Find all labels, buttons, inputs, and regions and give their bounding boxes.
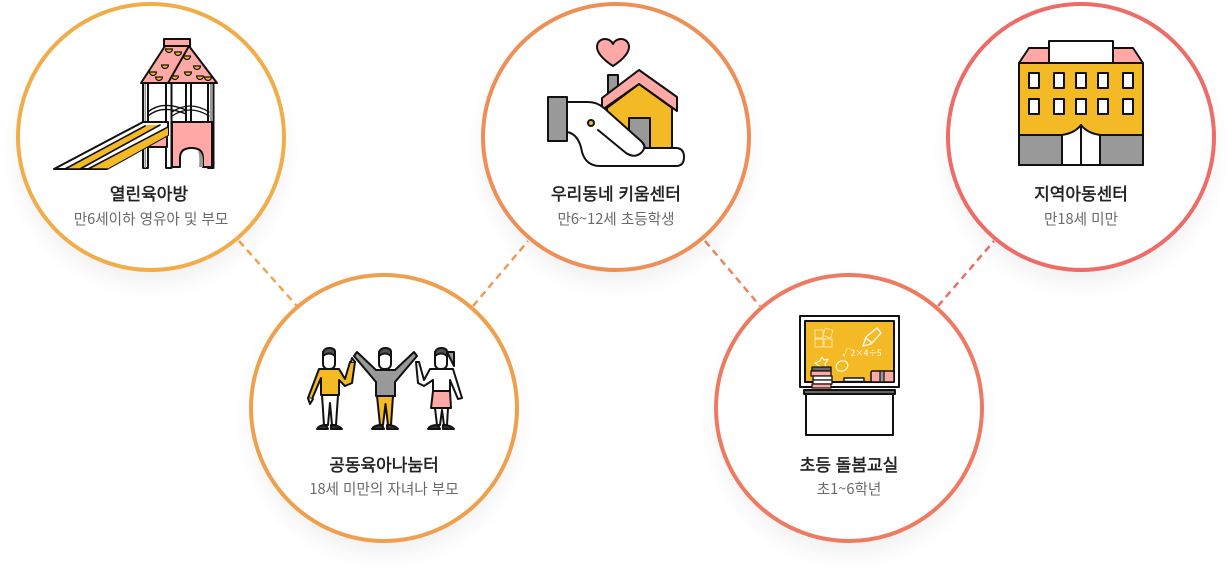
chalk drawings [815, 328, 881, 373]
icon: chalkboard and desk: √2×4÷5 [842, 347, 882, 359]
middle person [354, 348, 417, 429]
panel: open playroom [18, 4, 284, 278]
panel: neighborhood kids center [483, 4, 749, 278]
heading: neighborhood kids center: 우리동네 키움센터 [551, 180, 681, 205]
connector: playroom to commons [239, 241, 297, 306]
heading: open playroom: 열린육아방 [110, 180, 188, 205]
right person [416, 348, 462, 429]
icon: heart [597, 39, 629, 66]
heading: community children center: 지역아동센터 [1034, 180, 1128, 205]
left person [308, 348, 355, 429]
heading: community commons: 공동육아나눔터 [329, 451, 439, 476]
icon: three people [308, 348, 462, 429]
icon: center building [1019, 41, 1143, 165]
heading: elementary care classroom: 초등 돌봄교실 [800, 451, 898, 476]
icon: hand holding house [548, 39, 684, 166]
text: open playroom audience: 만6세이하 영유아 및 부모 [74, 208, 228, 229]
panel: elementary care classroom [716, 275, 982, 549]
icon: playground slide house [54, 39, 217, 169]
text: classroom audience: 초1~6학년 [817, 478, 881, 499]
panel: community children center [948, 4, 1214, 278]
connector: commons to kids center [473, 241, 528, 306]
text: children center audience: 만18세 미만 [1044, 208, 1118, 229]
text: commons audience: 18세 미만의 자녀나 부모 [309, 478, 459, 499]
connector: kids center to classroom [705, 241, 760, 306]
icon: chalkboard and desk [800, 316, 899, 435]
panel: community commons [251, 275, 517, 549]
text: kids center audience: 만6~12세 초등학생 [557, 208, 675, 229]
connector: classroom to community center [938, 241, 994, 306]
